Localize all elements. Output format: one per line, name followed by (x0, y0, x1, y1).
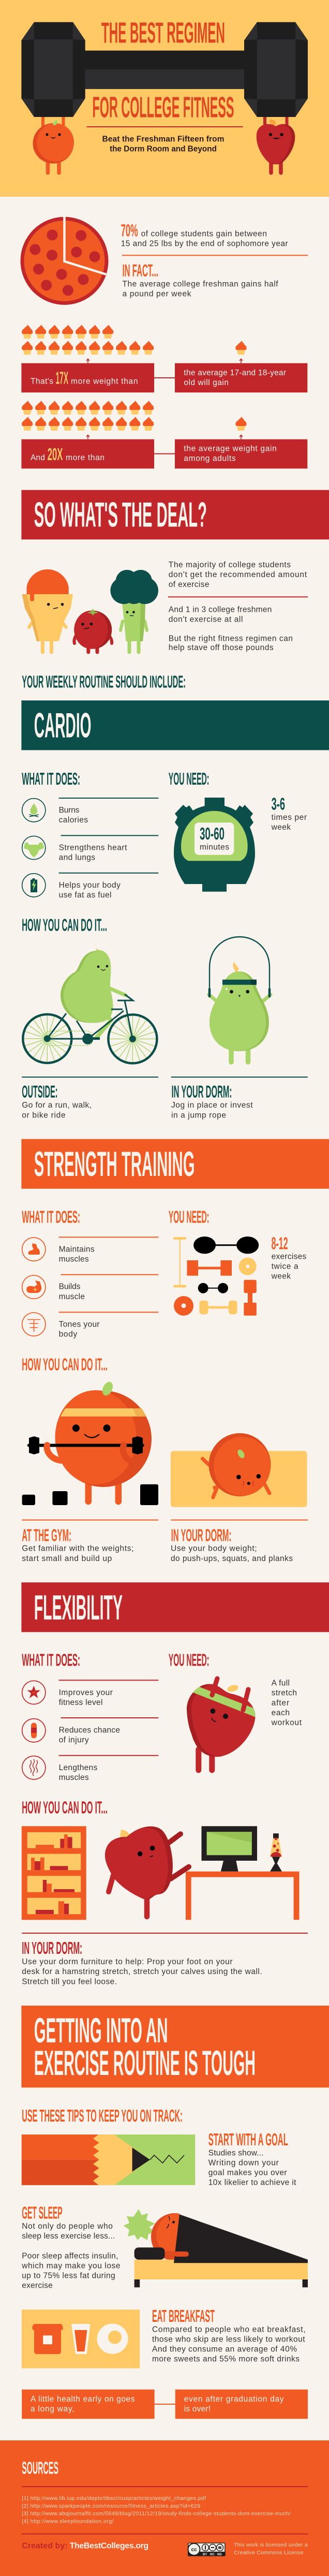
illustration: carrot sleeping in bed (123, 2209, 308, 2287)
text: eat breakfast: EAT BREAKFAST (152, 2307, 215, 2326)
text: get sleep: sleep less exercise less... (22, 2232, 115, 2241)
icon: orange character hanging (33, 117, 74, 173)
text: get sleep: which may make you lose (21, 2261, 121, 2270)
text: in your dorm flexibility: Use your dorm furniture to help: Prop your foot on your (22, 1957, 232, 1966)
icon: muscle plus (22, 1275, 46, 1299)
text: eat breakfast: those who skip are less likely to workout (152, 2335, 305, 2344)
callout: 20x more than: more than (66, 453, 104, 462)
text: the deal statistics: But the right fitness regimen can (169, 634, 293, 643)
callout: a little health early: is over! (184, 2405, 211, 2413)
license note (234, 2542, 308, 2556)
stat: 70 percent and in fact: a pound per week (122, 289, 191, 298)
credit: TheBestColleges.org (70, 2541, 148, 2550)
text: get sleep (21, 2204, 121, 2290)
weight stacks (22, 1484, 158, 1505)
icon: ice cream character (22, 569, 73, 652)
bicycle frame (47, 994, 133, 1039)
text: the deal statistics (168, 561, 308, 652)
illustration: desk and monitor (186, 1826, 299, 1920)
text: in your dorm flexibility: desk for a hamstring stretch, stretch your calves using the wall. (22, 1967, 262, 1976)
icon: battery (22, 874, 46, 897)
bicycle wheels (23, 1014, 157, 1063)
icon: arm (22, 1238, 46, 1261)
text: at the gym: start small and build up (22, 1554, 112, 1563)
callout: 17x more weight (21, 359, 307, 392)
text: get sleep: exercise (22, 2281, 53, 2290)
section banner: getting into an exercise routine (21, 2006, 329, 2087)
icon: assorted weights (173, 1237, 259, 1316)
text: start with a goal: Studies show... (208, 2148, 264, 2157)
title (92, 17, 234, 124)
illustration: apple touching toes (187, 1679, 260, 1770)
panel: cardio what it does: and lungs (59, 853, 95, 862)
icon: lava lamp (270, 1833, 282, 1872)
panel: cardio what it does: calories (59, 816, 88, 825)
callout: 20x more than: among adults (184, 454, 236, 463)
panel: flexibility what it does: fitness level (59, 1698, 102, 1707)
callout: a little health early (22, 2390, 308, 2419)
panel: flexibility what it does (22, 1651, 158, 1782)
panel: flexibility what it does: Improves your (59, 1688, 113, 1697)
illustration: pear riding a bicycle (23, 950, 157, 1063)
panel: cardio what it does: Helps your body (59, 881, 121, 890)
text: a full stretch: stretch (272, 1689, 297, 1698)
text: in your dorm flexibility (22, 1939, 262, 1986)
text: outside: OUTSIDE: (22, 1083, 58, 1102)
text: eat breakfast: And they consume an average of 40% (152, 2345, 297, 2354)
callout: a little health early: even after graduation day (184, 2395, 284, 2404)
callout: 17x more weight: That's (31, 377, 53, 386)
stat: 70 percent and in fact: 70% (121, 222, 138, 241)
illustration: orange lifting barbell (22, 1380, 158, 1505)
section banner: flexibility: FLEXIBILITY (34, 1588, 123, 1627)
text: in your dorm strength: IN YOUR DORM: (171, 1526, 232, 1545)
illustration: breakfast panel (22, 2309, 140, 2368)
callout: 20x more than: 20X (48, 445, 63, 464)
icon: stopwatch (174, 798, 255, 892)
panel: cardio you need: 3-6 (272, 794, 285, 814)
text: in your dorm cardio: Jog in place or invest (171, 1101, 253, 1110)
panel: strength what it does: Builds (59, 1283, 81, 1291)
illustration: pear with jump rope (206, 937, 271, 1062)
panel: cardio what it does: Strengthens heart (59, 844, 127, 852)
stat: 70 percent and in fact: The average college freshman gains half (122, 279, 278, 288)
text: in your dorm strength: do push-ups, squats, and planks (171, 1554, 293, 1563)
text: get sleep: Poor sleep affects insulin, (22, 2251, 118, 2260)
icon: flexed torso (22, 836, 46, 860)
callout: 17x more weight: old will gain (184, 378, 229, 387)
text: in your dorm cardio (171, 1083, 253, 1120)
icon: toast (32, 2324, 63, 2354)
icon: toning symbol (22, 1313, 46, 1336)
illustration: apple stretching on desk (100, 1827, 189, 1917)
panel: cardio you need: times per (272, 813, 307, 822)
panel: cardio what it does: use fat as fuel (59, 891, 111, 900)
callout: 20x more than: the average weight gain (184, 445, 277, 453)
panel: strength what it does: muscles (59, 1255, 89, 1263)
text: in your dorm flexibility: Stretch till you feel loose. (22, 1977, 117, 1986)
infographic canvas: HOW YOU CAN DO IT... (22, 916, 107, 935)
infographic canvas: HOW YOU CAN DO IT... (22, 1355, 108, 1374)
icon: muscle fibres (22, 1756, 46, 1779)
panel: strength what it does: Tones your (59, 1320, 100, 1329)
text: eat breakfast (152, 2307, 306, 2364)
stat: 70 percent and in fact: 15 and 25 lbs by the end of sophomore year (121, 240, 288, 248)
text: the deal statistics: help stave off those pounds (169, 643, 274, 652)
source links: [3] http://www.abqjournalfit.com/5648/blog/2011/12/19/study-finds-college-students-dont-exercise-much/ (22, 2511, 291, 2517)
text: a full stretch: after (272, 1699, 289, 1707)
text: start with a goal: 10x likelier to achieve it (208, 2178, 296, 2187)
panel: strength you need (169, 1208, 307, 1316)
text: a full stretch: workout (271, 1718, 302, 1727)
illustration: pencil (22, 2135, 195, 2185)
panel: flexibility what it does: WHAT IT DOES: (22, 1651, 80, 1670)
text: get sleep: GET SLEEP (22, 2204, 63, 2223)
subtitle: the Dorm Room and Beyond (110, 145, 217, 154)
callout: 20x more than (21, 435, 307, 468)
icon: creative commons badge: BY (203, 2553, 207, 2556)
callout: 17x more weight: 17X (56, 369, 68, 388)
text: a full stretch: each (272, 1709, 290, 1717)
text: outside: or bike ride (22, 1111, 66, 1120)
panel: flexibility you need (169, 1651, 302, 1770)
panel: strength you need: week (271, 1272, 291, 1281)
panel: flexibility what it does: of injury (59, 1736, 89, 1745)
icon: creative commons badge: NC (210, 2553, 215, 2556)
panel: cardio you need: YOU NEED: (169, 770, 209, 789)
callout: 17x more weight: the average 17-and 18-year (184, 369, 286, 377)
text: in your dorm flexibility: IN YOUR DORM: (22, 1939, 82, 1958)
icon: creative commons badge: cc (191, 2547, 197, 2553)
text: at the gym: Get familiar with the weights; (22, 1544, 133, 1553)
text: a full stretch: A full (272, 1679, 290, 1688)
footer panel: SOURCES (22, 2459, 58, 2478)
license note: This work is licensed under a (234, 2542, 308, 2548)
callout: 20x more than: And (31, 453, 45, 462)
source links: [2] http://www.sparkpeople.com/resource/fitness_articles.asp?id=629 (22, 2503, 200, 2509)
panel: flexibility what it does: Lengthens (59, 1763, 97, 1772)
text: in your dorm cardio: in a jump rope (171, 1111, 226, 1120)
illustration: bookshelf (22, 1826, 86, 1920)
icon: fire (22, 799, 46, 822)
pictogram: cupcakes 17x (22, 325, 247, 355)
panel: flexibility what it does: muscles (59, 1773, 89, 1782)
header panel (0, 0, 329, 197)
stat: 70 percent and in fact: IN FACT... (122, 261, 158, 281)
text: at the gym: AT THE GYM: (22, 1526, 71, 1545)
section banner: flexibility (21, 1582, 329, 1632)
stat: 70 percent and in fact: of college students gain between (141, 230, 267, 239)
source links: [4] http://www.sleepfoundation.org/ (22, 2519, 114, 2525)
text: in your dorm strength (171, 1526, 293, 1563)
panel: strength what it does: WHAT IT DOES: (22, 1208, 80, 1227)
text: start with a goal: Writing down your (208, 2158, 279, 2167)
text: at the gym (22, 1526, 133, 1563)
icon: dumbbell (21, 22, 308, 117)
panel: cardio what it does: WHAT IT DOES: (22, 770, 80, 789)
text: a full stretch (271, 1679, 302, 1727)
section banner: cardio (21, 700, 329, 750)
icon: tomato character (74, 609, 112, 652)
text: the deal statistics: don't exercise at all (169, 615, 243, 624)
panel: strength what it does (22, 1208, 158, 1338)
callout: 17x more weight: more weight than (71, 377, 138, 386)
icon: fried egg (97, 2323, 128, 2354)
text: get sleep: Not only do people who (22, 2222, 113, 2231)
text: the deal statistics: don't get the recommended amount (169, 570, 307, 579)
text: eat breakfast: more sweets and 55% more soft drinks (152, 2355, 300, 2364)
callout: a little health early: a long way, (31, 2405, 74, 2413)
panel: strength you need: exercises (272, 1253, 307, 1261)
text: the deal statistics: The majority of college students (169, 561, 291, 569)
credit (22, 2541, 148, 2550)
source links (22, 2495, 291, 2525)
text: the deal statistics: of exercise (169, 580, 209, 589)
panel: strength what it does: muscle (59, 1292, 85, 1301)
panel: strength you need: YOU NEED: (169, 1208, 209, 1227)
icon: stopwatch: minutes (200, 843, 229, 852)
panel: flexibility what it does: Reduces chance (59, 1726, 120, 1734)
license note: Creative Commons License (234, 2550, 304, 2556)
subtitle: Beat the Freshman Fifteen from (102, 135, 225, 143)
pictogram: cupcakes 20x (22, 401, 247, 431)
panel: flexibility you need: YOU NEED: (169, 1651, 209, 1670)
text: in your dorm strength: Use your body weight; (171, 1544, 257, 1553)
icon: pizza with missing slice (21, 215, 109, 305)
source links: [1] http://www.lib.iup.edu/depts/libsci/cusp/articles/weight_changes.pdf (22, 2495, 206, 2501)
panel: cardio you need: week (271, 823, 291, 832)
text: start with a goal (208, 2130, 296, 2187)
panel: strength what it does: Maintains (59, 1245, 95, 1254)
icon: apple character hanging (257, 117, 295, 173)
text: the deal statistics: And 1 in 3 college freshmen (169, 605, 272, 614)
barbell (27, 1436, 144, 1454)
panel: cardio you need (169, 770, 307, 892)
stat: 70 percent and in fact (121, 222, 308, 298)
infographic canvas: HOW YOU CAN DO IT... (22, 1799, 108, 1818)
panel: cardio what it does (22, 770, 158, 900)
illustration: orange doing push-ups on mat (171, 1433, 307, 1507)
panel: strength you need: twice a (272, 1262, 298, 1271)
subtitle (102, 135, 225, 154)
footer panel (0, 2440, 329, 2576)
callout: a little health early: A little health early on goes (31, 2395, 135, 2404)
icon: stopwatch: 30-60 (200, 825, 225, 844)
text: get sleep: up to 75% less fat during (22, 2271, 115, 2280)
text: outside: Go for a run, walk, (22, 1101, 92, 1110)
icon: juice glass (71, 2324, 90, 2354)
icon: star (22, 1681, 46, 1704)
icon: creative commons badge (188, 2543, 226, 2556)
text: outside (22, 1083, 92, 1120)
text: start with a goal: goal makes you over (208, 2168, 287, 2177)
credit: Created by: (22, 2541, 68, 2550)
icon: broccoli character (110, 570, 158, 652)
panel: strength what it does: body (59, 1330, 78, 1338)
section banner: cardio: CARDIO (34, 705, 91, 745)
text: eat breakfast: Compared to people who eat breakfast, (152, 2325, 306, 2334)
icon: capsule (22, 1719, 46, 1742)
text: in your dorm cardio: IN YOUR DORM: (172, 1083, 232, 1102)
icon: creative commons badge: ND (217, 2553, 222, 2556)
panel: cardio what it does: Burns (59, 806, 80, 815)
panel: strength you need: 8-12 (272, 1234, 288, 1253)
